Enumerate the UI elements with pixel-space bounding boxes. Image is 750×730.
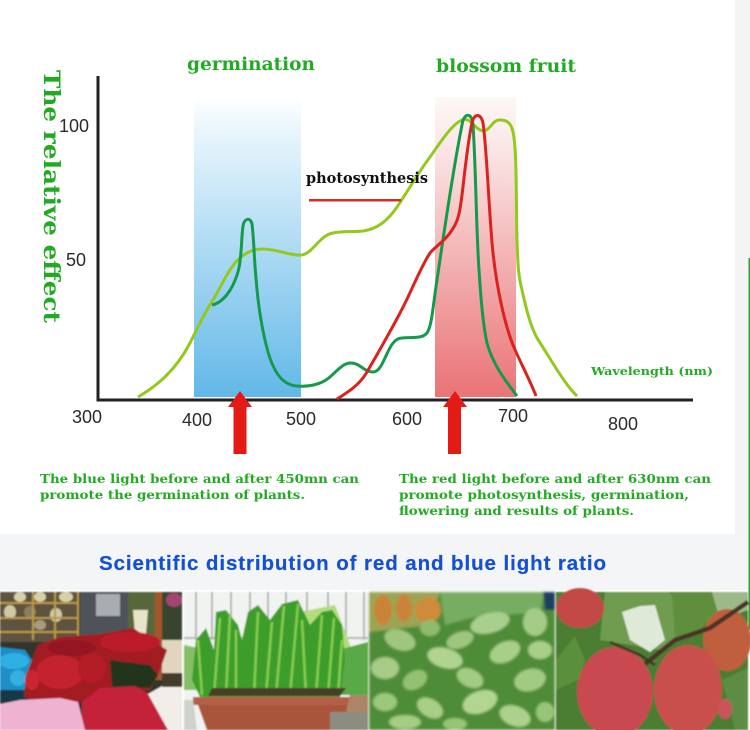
- background side strip: [735, 0, 750, 590]
- heading: blue banner title: Scientific distribution of red and blue light ratio: [99, 552, 606, 575]
- arrow: blue peak: [228, 391, 252, 454]
- curve: dark green absorption: [212, 115, 517, 396]
- text: blue light note: The blue light before and after 450mn can: [40, 471, 359, 486]
- y axis labels: 50: [66, 250, 86, 270]
- x axis labels: 300: [72, 407, 102, 427]
- x axis labels: [72, 406, 638, 434]
- text: red light note: promote photosynthesis, germination,: [399, 487, 689, 502]
- label: photosynthesis: photosynthesis: [306, 170, 428, 187]
- text: blue light note: promote the germination of plants.: [40, 487, 305, 502]
- curve: photosynthesis light green: [138, 119, 577, 397]
- blue flowers: [0, 647, 35, 700]
- y axis labels: [59, 116, 89, 270]
- x axis labels: 400: [182, 410, 212, 430]
- red flowers: [24, 628, 167, 702]
- label: photosynthesis: [306, 170, 428, 202]
- curve: red absorption: [337, 116, 536, 399]
- photo: leafy greens: [369, 592, 555, 730]
- text: red light note: The red light before and after 630nm can: [399, 471, 711, 486]
- panel: blue light band: [194, 97, 301, 397]
- x axis labels: 700: [498, 406, 528, 426]
- y axis labels: 100: [59, 116, 89, 136]
- x axis labels: 800: [608, 414, 638, 434]
- x axis labels: 500: [286, 409, 316, 429]
- title: vertical axis label: The relative effect: [38, 70, 64, 324]
- heading: germination: germination: [187, 55, 315, 75]
- white flowers: [148, 686, 182, 730]
- pink flowers: [0, 698, 85, 730]
- right edge green line: [748, 258, 750, 630]
- chart axes: [98, 76, 693, 400]
- heading: blossom fruit: blossom fruit: [436, 57, 576, 77]
- grass: [192, 600, 345, 697]
- photo: potted seedlings: [184, 592, 368, 730]
- text: red light note: [399, 471, 711, 518]
- label: wavelength: Wavelength (nm): [590, 364, 713, 378]
- grey band background: [0, 534, 750, 590]
- x axis labels: 600: [392, 409, 422, 429]
- photo: red fruit on branch: [556, 588, 750, 730]
- text: blue light note: [40, 471, 359, 502]
- photo: flower market: [0, 592, 182, 730]
- text: red light note: flowering and results of plants.: [399, 503, 634, 518]
- arrow: red peak: [443, 391, 467, 454]
- panel: red light band: [435, 97, 516, 397]
